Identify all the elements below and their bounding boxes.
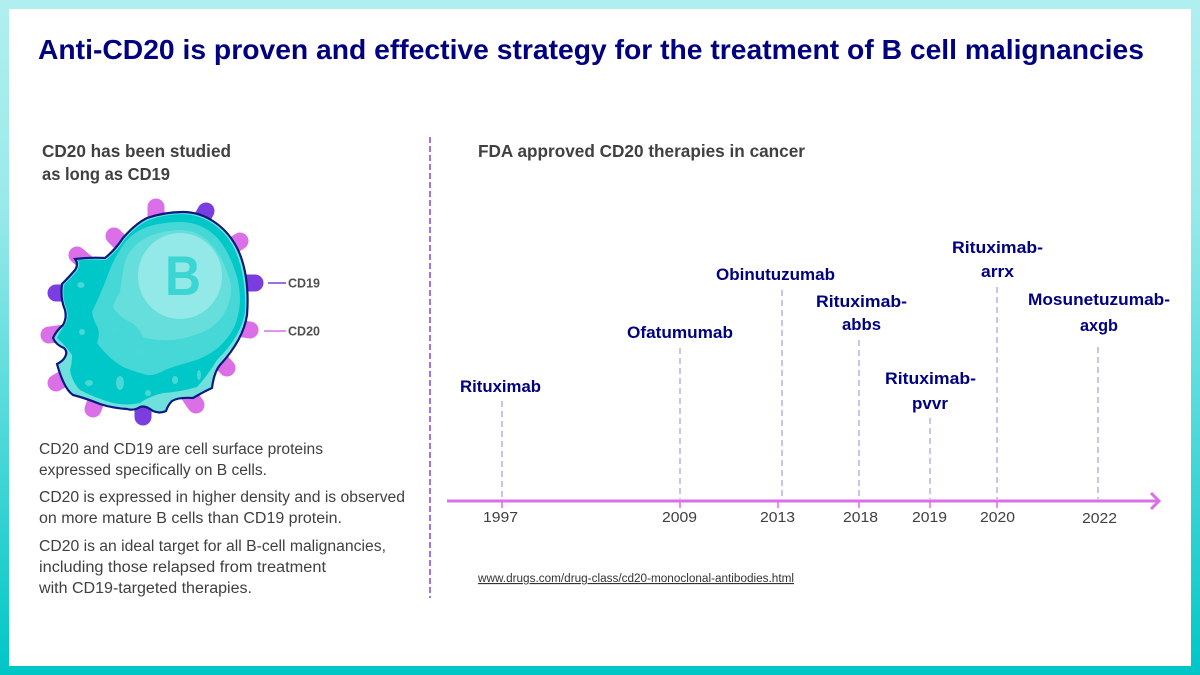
heading: CD20 studied: CD20 has been studied: [42, 141, 231, 161]
milestone: Rituximab-pvvr 2019: [885, 370, 976, 526]
label: CD19: CD19: [288, 276, 320, 290]
milestone: Rituximab 1997: Rituximab: [460, 378, 541, 396]
milestone: Rituximab-abbs 2018: 2018: [843, 509, 878, 526]
heading: CD20 studied: [42, 141, 231, 184]
letter B: B: [165, 244, 201, 307]
milestone: Mosunetuzumab-axgb 2022: Mosunetuzumab-: [1028, 291, 1170, 309]
icon: B cell illustration: [49, 207, 255, 417]
heading: CD20 studied: as long as CD19: [42, 164, 170, 184]
milestone: Rituximab-pvvr 2019: Rituximab-: [885, 370, 976, 388]
milestone: Obinutuzumab 2013: 2013: [760, 509, 795, 526]
milestone: Rituximab-abbs 2018: [816, 293, 907, 526]
cell body: [53, 212, 248, 412]
label: CD20: [264, 324, 320, 338]
text block: surface proteins: CD20 and CD19 are cell surface proteins: [39, 441, 323, 458]
text block: ideal target: [38, 538, 386, 597]
text block: expression density: [39, 489, 405, 527]
milestone: Rituximab 1997: 1997: [483, 509, 518, 526]
milestone: Ofatumumab 2009: [627, 324, 733, 526]
milestone: Mosunetuzumab-axgb 2022: 2022: [1082, 510, 1117, 527]
milestone: Obinutuzumab 2013: [716, 266, 835, 526]
milestone: Rituximab 1997: [460, 378, 541, 526]
milestone: Mosunetuzumab-axgb 2022: [1028, 291, 1170, 527]
text block: surface proteins: expressed specifically on B cells.: [39, 462, 267, 479]
milestone: Rituximab-arrx 2020: arrx: [981, 263, 1015, 281]
milestone: Rituximab-arrx 2020: Rituximab-: [952, 239, 1043, 257]
panel: CD20 overview: [38, 141, 405, 597]
text block: expression density: on more mature B cells than CD19 protein.: [39, 510, 342, 527]
heading: FDA approved therapies: FDA approved CD20 therapies in cancer: [478, 141, 805, 161]
cell nucleus: [138, 233, 222, 319]
CD19 receptors: [56, 211, 255, 417]
title: Anti-CD20 is proven and effective strategy for the treatment of B cell malignancies: [38, 34, 1144, 65]
milestone: Obinutuzumab 2013: Obinutuzumab: [716, 266, 835, 284]
milestone: Ofatumumab 2009: Ofatumumab: [627, 324, 733, 342]
label: CD19: [268, 276, 320, 290]
cell inner layer: [57, 214, 245, 404]
milestone: Rituximab-abbs 2018: abbs: [842, 316, 881, 334]
cell organelles: [78, 282, 214, 396]
text block: ideal target: CD20 is an ideal target for all B-cell malignancies,: [39, 538, 386, 555]
text block: ideal target: including those relapsed from treatment: [39, 559, 327, 576]
label: CD20: CD20: [288, 324, 320, 338]
cell mid layer: [92, 222, 240, 375]
source link: www.drugs.com/drug-class/cd20-monoclonal-antibodies.html: [477, 573, 794, 585]
milestone: Mosunetuzumab-axgb 2022: axgb: [1080, 317, 1118, 335]
text block: surface proteins: [39, 441, 323, 479]
milestone: Rituximab-arrx 2020: 2020: [980, 509, 1015, 526]
text block: ideal target: with CD19-targeted therapies.: [38, 580, 252, 597]
text block: expression density: CD20 is expressed in higher density and is observed: [39, 489, 405, 506]
milestone: Ofatumumab 2009: 2009: [662, 509, 697, 526]
cell light layer: [113, 230, 231, 340]
timeline axis arrow: [447, 493, 1159, 509]
CD20 receptors: [49, 207, 250, 409]
panel: FDA approvals timeline: [447, 141, 1170, 585]
milestone: Rituximab-arrx 2020: [952, 239, 1043, 526]
milestone: Rituximab-pvvr 2019: 2019: [912, 509, 947, 526]
milestone: Rituximab-pvvr 2019: pvvr: [912, 395, 949, 413]
milestone: Rituximab-abbs 2018: Rituximab-: [816, 293, 907, 311]
